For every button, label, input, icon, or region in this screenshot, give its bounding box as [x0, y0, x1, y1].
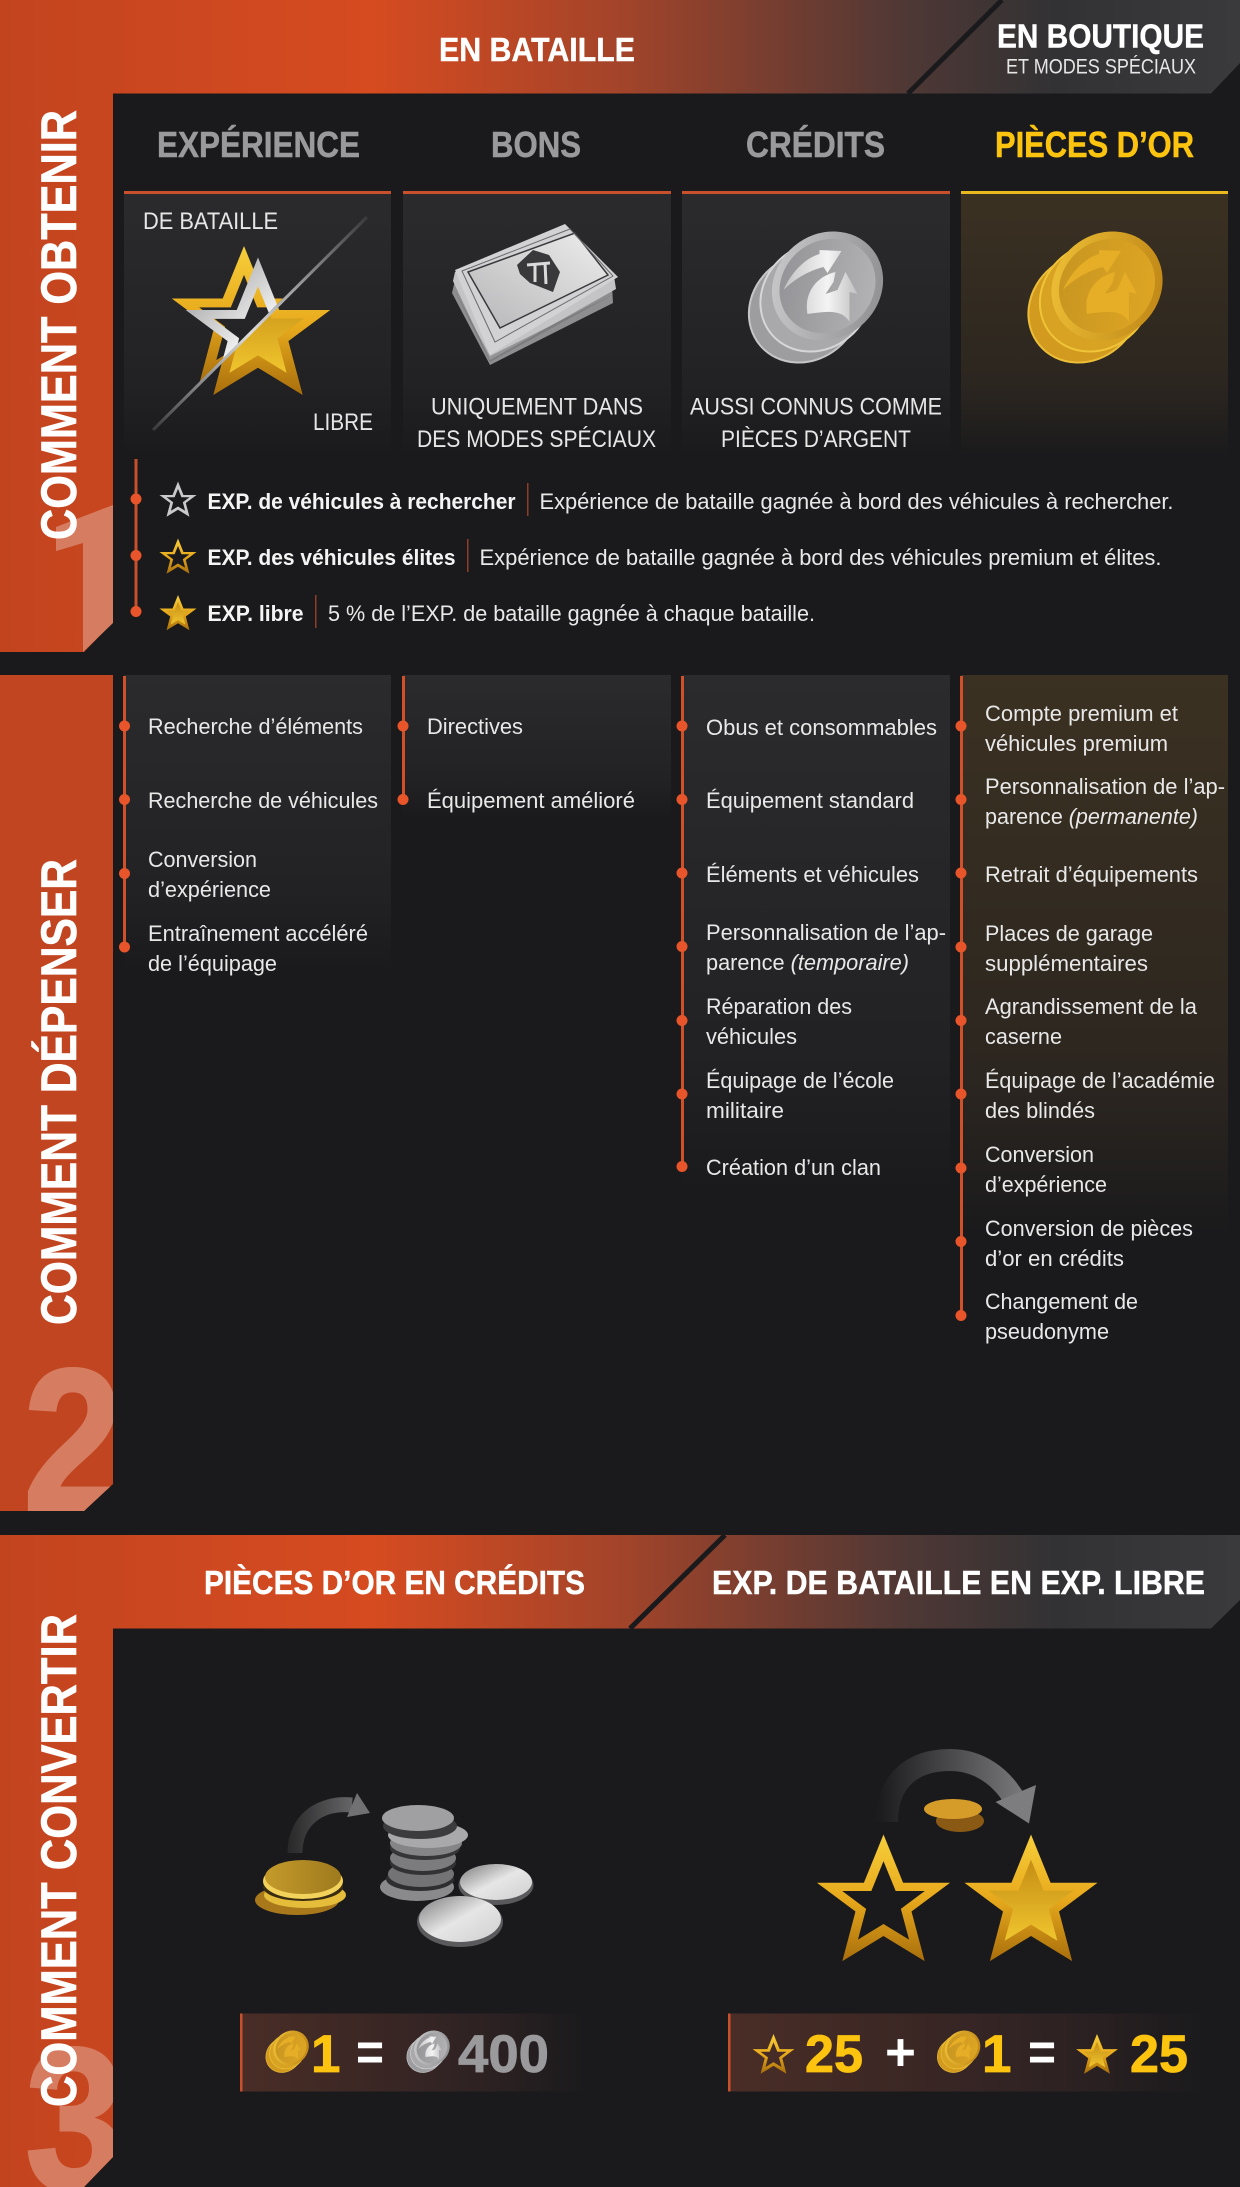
- items: Retrait d’équipements: [985, 862, 1198, 887]
- icon: gold coins: [259, 2023, 316, 2080]
- header: exp de bataille en exp libre: EXP. DE BATAILLE EN EXP. LIBRE: [712, 1564, 1205, 1601]
- items: Équipement standard: [706, 788, 914, 813]
- caption: aussi connus comme pièces d'argent: [690, 394, 942, 453]
- equals: =: [356, 2023, 384, 2082]
- items: Personnalisation de l’ap-: [985, 774, 1225, 799]
- filled star: [964, 1834, 1098, 1961]
- illustration: stars conversion: [817, 1760, 1098, 1961]
- icon: silver coins: [400, 2023, 457, 2080]
- icon: voucher stack: [452, 224, 618, 365]
- items: Création d’un clan: [706, 1155, 881, 1180]
- icon: filled star: [1076, 2034, 1118, 2074]
- items: Conversion de pièces: [985, 1216, 1193, 1241]
- items: de l’équipage: [148, 951, 277, 976]
- items: Recherche de véhicules: [148, 788, 378, 813]
- arrow: [295, 1793, 370, 1853]
- panel: expérience: [124, 191, 391, 457]
- icon: gold coins: [930, 2023, 987, 2080]
- header: en bataille: EN BATAILLE: [439, 31, 635, 68]
- vertical title: COMMENT OBTENIR: [31, 110, 87, 540]
- caption: de bataille: DE BATAILLE: [143, 208, 278, 235]
- items: Conversion: [985, 1142, 1094, 1167]
- flat silver coins: [417, 1864, 534, 1947]
- header: en boutique: [997, 18, 1204, 78]
- items: Équipage de l’école: [706, 1068, 894, 1093]
- items: véhicules: [706, 1024, 797, 1049]
- spend column: expérience: [119, 675, 391, 976]
- equals: =: [1028, 2023, 1056, 2082]
- silver stack: [380, 1805, 468, 1901]
- value: 25: 25: [1130, 2025, 1188, 2084]
- spend column: crédits: [676, 675, 950, 1195]
- items: d’expérience: [985, 1172, 1107, 1197]
- rate bar: 25 exp + 1 gold = 25 free exp: [728, 2014, 1205, 2092]
- items: parence (permanente): [985, 804, 1198, 829]
- items: Entraînement accéléré: [148, 921, 368, 946]
- column heading: bons: BONS: [491, 124, 581, 165]
- items: Directives: [427, 714, 523, 739]
- header: en boutique: EN BOUTIQUE: [997, 18, 1204, 54]
- items: des blindés: [985, 1098, 1095, 1123]
- section 2: comment dépenser: [0, 675, 1228, 1555]
- items: Équipement amélioré: [427, 788, 635, 813]
- row: exp véhicules à rechercher: EXP. de véhicules à rechercher: [208, 489, 516, 514]
- value: 1: 1: [982, 2025, 1011, 2084]
- orange header frame: [0, 1535, 1240, 2187]
- panel: pièces d'or: [961, 191, 1228, 457]
- items: Réparation des: [706, 994, 852, 1019]
- icon: split star: [153, 217, 367, 430]
- column heading: pièces d'or: PIÈCES D’OR: [995, 124, 1194, 165]
- orange header frame: [0, 0, 1240, 652]
- header: pièces d'or en crédits: PIÈCES D’OR EN CRÉDITS: [204, 1564, 585, 1601]
- items: [706, 715, 946, 1180]
- row: exp véhicules élites: [159, 538, 1162, 574]
- illustration: gold coins to silver credits: [255, 1793, 534, 1947]
- items: pseudonyme: [985, 1319, 1109, 1344]
- items: militaire: [706, 1098, 784, 1123]
- value: 25: 25: [805, 2025, 863, 2084]
- items: Compte premium et: [985, 701, 1178, 726]
- caption: aussi connus comme pièces d'argent: AUSSI CONNUS COMME: [690, 394, 942, 420]
- row: exp véhicules élites: Expérience de bataille gagnée à bord des véhicules premium et élites.: [480, 545, 1162, 570]
- small gold coins: [924, 1799, 984, 1832]
- spend column: bons: [398, 675, 671, 820]
- vertical title: COMMENT CONVERTIR: [31, 1614, 87, 2107]
- items: Obus et consommables: [706, 715, 937, 740]
- header: en boutique: ET MODES SPÉCIAUX: [1006, 56, 1196, 78]
- items: Recherche d’éléments: [148, 714, 363, 739]
- caption: uniquement dans des modes spéciaux: UNIQUEMENT DANS: [431, 394, 643, 420]
- row: exp libre: EXP. libre: [208, 601, 304, 626]
- caption: uniquement dans des modes spéciaux: DES MODES SPÉCIAUX: [417, 426, 656, 453]
- column heading: expérience: EXPÉRIENCE: [157, 124, 360, 165]
- items: d’or en crédits: [985, 1246, 1124, 1271]
- gold stack: [255, 1860, 346, 1915]
- items: véhicules premium: [985, 731, 1168, 756]
- panel: bons: [403, 191, 671, 457]
- rate bar: 1 gold = 400 credits: [240, 2014, 585, 2092]
- panel: crédits: [682, 191, 950, 457]
- row: exp libre: 5 % de l’EXP. de bataille gagnée à chaque bataille.: [328, 601, 815, 626]
- row: exp véhicules élites: EXP. des véhicules élites: [208, 545, 456, 570]
- spend column: pièces d'or: [956, 675, 1228, 1344]
- items: parence (temporaire): [706, 950, 909, 975]
- vertical title: COMMENT DÉPENSER: [31, 859, 87, 1325]
- outline star: [817, 1834, 950, 1961]
- items: [148, 714, 378, 976]
- items: Places de garage: [985, 921, 1153, 946]
- items: caserne: [985, 1024, 1062, 1049]
- number 2: 2: [23, 1327, 123, 1555]
- value: 400: 400: [458, 2025, 549, 2084]
- left orange column: [0, 675, 113, 1511]
- items: d’expérience: [148, 877, 271, 902]
- items: Personnalisation de l’ap-: [706, 920, 946, 945]
- items: Changement de: [985, 1289, 1138, 1314]
- column heading: crédits: CRÉDITS: [746, 124, 885, 165]
- row: exp véhicules à rechercher: [159, 482, 1174, 517]
- row: exp libre: [159, 595, 815, 630]
- plus: +: [885, 2023, 916, 2082]
- items: Éléments et véhicules: [706, 862, 919, 887]
- arrow: [887, 1760, 1036, 1824]
- value: 1: 1: [311, 2025, 340, 2084]
- items: supplémentaires: [985, 951, 1148, 976]
- items: [985, 701, 1225, 1344]
- caption: uniquement dans des modes spéciaux: [417, 394, 656, 453]
- row: exp véhicules à rechercher: Expérience de bataille gagnée à bord des véhicules à rechercher.: [540, 489, 1174, 514]
- icon: silver coins: [727, 209, 905, 385]
- items: Équipage de l’académie: [985, 1068, 1215, 1093]
- items: [427, 714, 635, 813]
- icon: outline star: [753, 2034, 794, 2074]
- section 3: comment convertir: [0, 1535, 1240, 2187]
- items: Conversion: [148, 847, 257, 872]
- icon: gold coins: [1006, 209, 1185, 385]
- items: Agrandissement de la: [985, 994, 1198, 1019]
- section 1: comment obtenir: [0, 0, 1240, 652]
- experience legend list: [130, 459, 1174, 630]
- number 1: 1: [30, 454, 169, 733]
- caption: aussi connus comme pièces d'argent: PIÈCES D’ARGENT: [721, 426, 911, 453]
- caption: libre: LIBRE: [313, 409, 373, 436]
